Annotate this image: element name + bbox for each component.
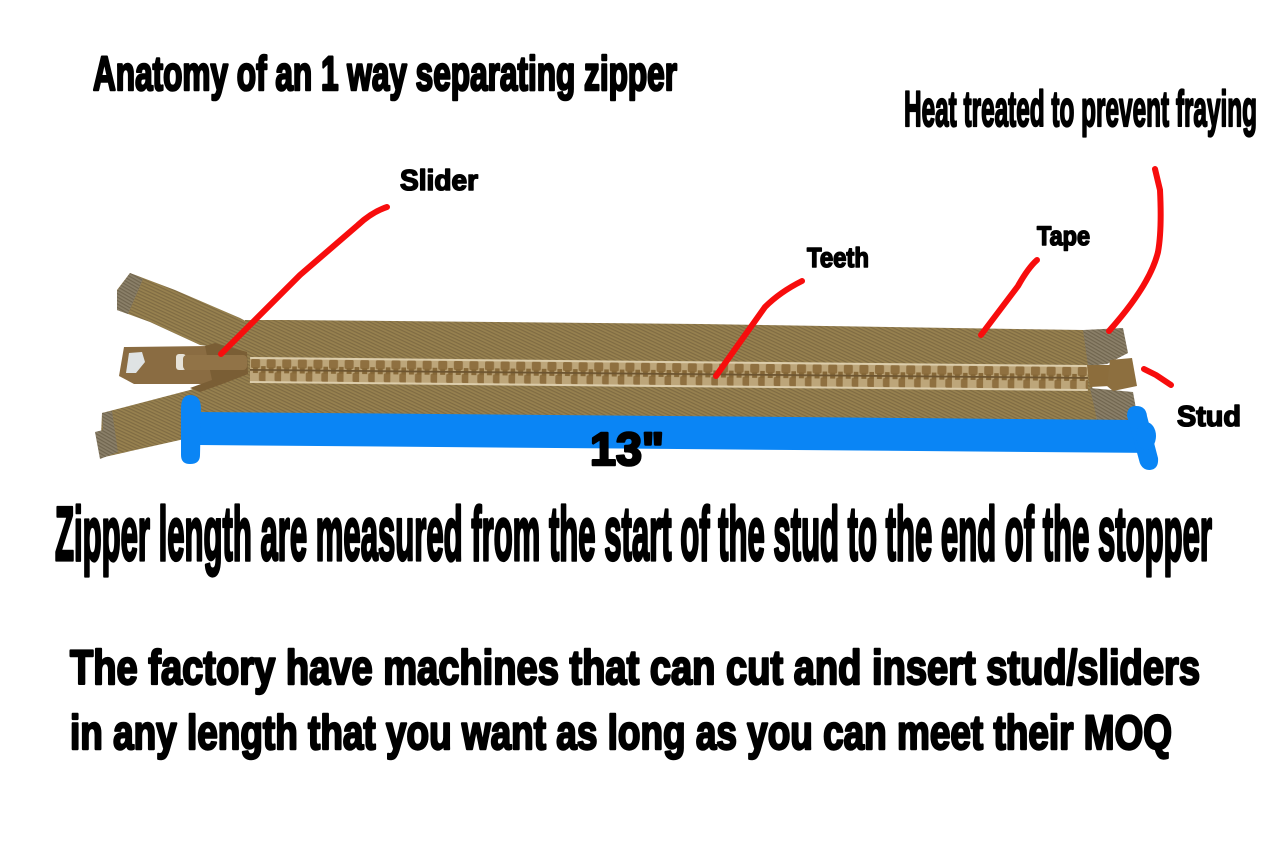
- upper tape grey end: [117, 273, 143, 314]
- pointer: slider: [221, 207, 387, 354]
- zipper: [95, 273, 1138, 459]
- slider body: [190, 343, 248, 392]
- lower tape grey end: [95, 411, 118, 459]
- measuring bar: [181, 395, 1158, 470]
- pointer: heat treated: [1109, 169, 1161, 331]
- pointer: tape: [981, 260, 1037, 335]
- label: teeth: Teeth: [807, 242, 869, 273]
- title: Anatomy of an 1 way separating zipper: [93, 48, 677, 101]
- slider pull tab: [119, 346, 214, 384]
- red pointers: [221, 169, 1171, 385]
- pointer: stud: [1144, 369, 1171, 385]
- label: slider: Slider: [400, 165, 478, 197]
- label: tape: Tape: [1037, 221, 1090, 251]
- teeth: [250, 357, 1088, 391]
- main tape: [190, 320, 1097, 420]
- label: stud: Stud: [1177, 401, 1241, 433]
- stud: [1087, 365, 1110, 387]
- lower loose tape: [100, 372, 260, 458]
- factory note: [70, 642, 1200, 760]
- upper loose tape: [117, 273, 262, 352]
- pointer: teeth: [716, 281, 802, 376]
- grey heat-treated ends: [1083, 328, 1128, 366]
- 13 inch label: 13": [590, 423, 664, 475]
